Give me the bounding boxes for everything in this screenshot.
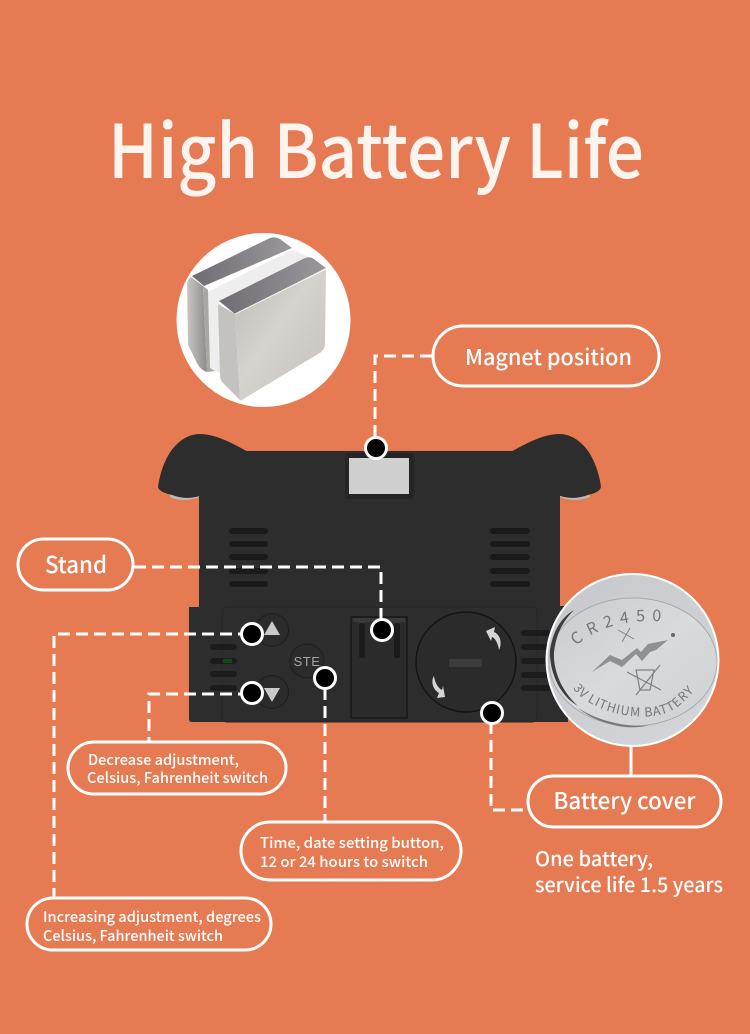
battery cover (416, 612, 516, 712)
coin text: 3V LITHIUM BATTERY (574, 684, 692, 717)
device ears (158, 434, 601, 500)
device back view (158, 434, 601, 722)
front magnet (218, 257, 326, 400)
device body (189, 451, 568, 722)
battery life note: One battery, (535, 843, 653, 872)
down button (256, 676, 288, 708)
coin text (572, 610, 692, 717)
stand (351, 617, 407, 718)
callout: stand: Stand (45, 546, 107, 580)
magnet window (345, 453, 414, 499)
callout: time and date button: Time, date setting button, (260, 832, 444, 853)
connector lines (54, 356, 631, 897)
callout: decrease adjustment: Decrease adjustment, (88, 749, 239, 770)
rotate arrow: lower (432, 676, 445, 698)
coin recycling mark (627, 665, 661, 695)
lower panel (222, 607, 537, 722)
rear magnet (187, 237, 292, 372)
marker dots (242, 438, 502, 724)
magnet photo circle (176, 233, 350, 407)
callout: stand (18, 539, 133, 590)
infographic canvas (16, 118, 722, 952)
callout: time and date button (241, 822, 461, 880)
callout: increasing adjustment: Increasing adjustment, degrees (43, 906, 261, 927)
rotate arrow: upper (486, 627, 501, 650)
coin dark edge (550, 610, 578, 706)
callout: battery cover (528, 776, 721, 827)
upper vents (229, 528, 530, 587)
STE button: STE (294, 654, 320, 669)
battery photo circle (546, 573, 720, 747)
callout: magnet position: Magnet position (465, 340, 632, 372)
coin cross mark (618, 628, 634, 642)
callout: battery cover: Battery cover (554, 782, 696, 816)
coin bottom shadow (578, 708, 650, 727)
title: High Battery Life (108, 93, 644, 200)
coin text: CR2450 (572, 610, 660, 644)
callout: increasing adjustment: Celsius, Fahrenheit switch (43, 925, 223, 946)
callout: time and date button: 12 or 24 hours to switch (260, 851, 428, 872)
lower vents (210, 630, 551, 691)
callout: magnet position (433, 326, 659, 386)
callout: increasing adjustment (27, 898, 271, 950)
battery life note (535, 843, 723, 898)
battery life note: service life 1.5 years (535, 869, 723, 898)
coin (549, 598, 717, 726)
white spacer (208, 250, 310, 374)
STE button (290, 644, 324, 678)
callout: decrease adjustment (68, 742, 286, 794)
callout: decrease adjustment: Celsius, Fahrenheit switch (87, 767, 268, 788)
coin logo (592, 640, 668, 672)
up button (256, 614, 288, 646)
